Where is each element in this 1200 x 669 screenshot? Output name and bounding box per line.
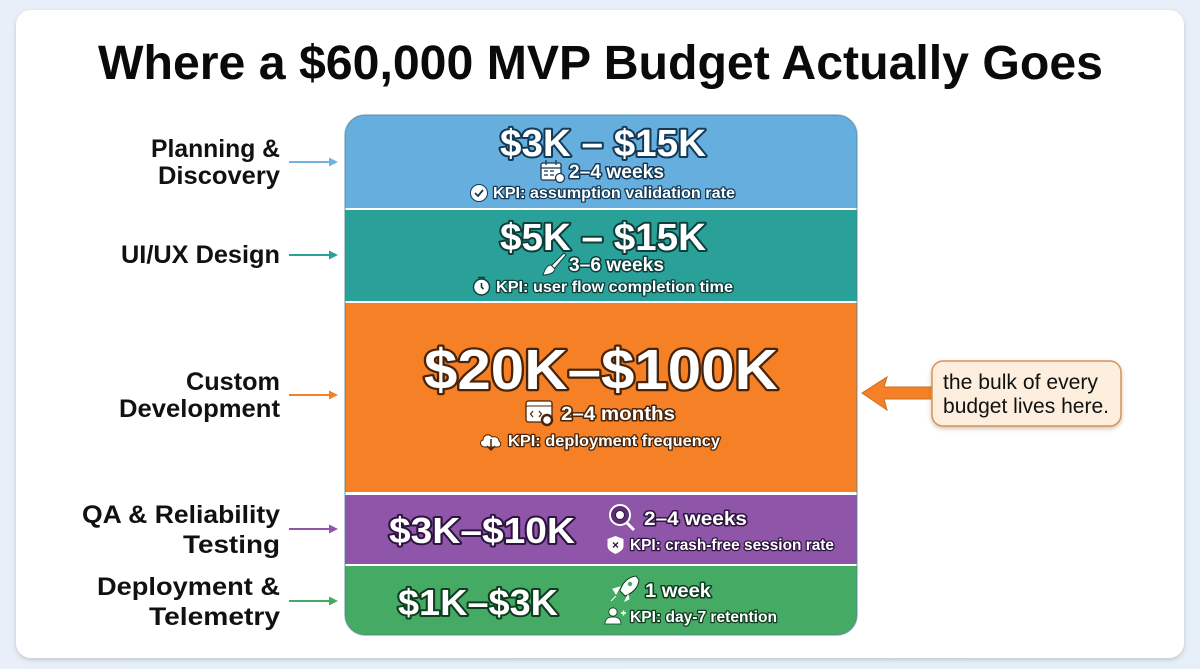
- label: UI/UX design: UI/UX Design: [121, 241, 280, 269]
- label: planning and discovery: Planning &: [151, 135, 280, 163]
- panel: UI/UX design layer: 3–6 weeks: [569, 255, 664, 276]
- panel: deployment and telemetry layer: $1K–$3K: [398, 582, 558, 623]
- arrow: deployment: [289, 596, 338, 606]
- panel: custom development layer: 2–4 months: [561, 404, 675, 425]
- label: QA and reliability testing: QA & Reliability: [82, 501, 280, 529]
- icon: user with plus: [605, 608, 626, 624]
- panel: stacked budget funnel: [345, 115, 857, 635]
- arrow: custom development: [289, 390, 338, 400]
- label: deployment and telemetry: Telemetry: [149, 603, 280, 631]
- title: Where a $60,000 MVP Budget Actually Goes: [98, 37, 1103, 90]
- icon: rocket: [611, 576, 639, 601]
- icon: magnifier with target: [610, 505, 634, 530]
- icon: code window with gear: [526, 401, 552, 425]
- panel: custom development layer: $20K–$100K: [424, 338, 778, 402]
- panel: deployment and telemetry layer: 1 week: [645, 581, 711, 602]
- panel: deployment and telemetry layer: [398, 576, 777, 626]
- icon: calendar with clock: [541, 160, 564, 182]
- label: custom development: [119, 368, 281, 423]
- label: deployment and telemetry: Deployment &: [97, 573, 280, 601]
- panel: QA and reliability testing layer: 2–4 weeks: [644, 509, 747, 530]
- label: QA and reliability testing: Testing: [183, 531, 280, 559]
- label: planning and discovery: [151, 135, 280, 190]
- label: custom development: Development: [119, 395, 281, 423]
- panel: UI/UX design layer: KPI: user flow completion time: [496, 279, 733, 296]
- panel: UI/UX design layer: [474, 217, 733, 296]
- panel: deployment and telemetry layer: KPI: day-7 retention: [630, 609, 777, 626]
- callout: the bulk of every: [943, 371, 1098, 394]
- arrow: QA: [289, 524, 338, 534]
- panel: QA and reliability testing layer: KPI: crash-free session rate: [630, 537, 834, 554]
- icon: cloud download: [481, 435, 501, 450]
- panel: QA and reliability testing layer: [389, 505, 834, 554]
- label: custom development: Custom: [186, 368, 280, 396]
- arrow: UI/UX: [289, 250, 338, 260]
- icon: check badge: [470, 184, 488, 202]
- callout: budget lives here.: [943, 395, 1109, 418]
- label: planning and discovery: Discovery: [158, 162, 280, 190]
- arrow: callout pointer: [862, 377, 933, 410]
- panel: planning and discovery layer: KPI: assumption validation rate: [493, 185, 735, 202]
- arrow: planning: [289, 158, 338, 166]
- callout: [932, 361, 1121, 426]
- label: deployment and telemetry: [97, 573, 280, 631]
- icon: paintbrush: [543, 253, 566, 275]
- panel: planning and discovery layer: 2–4 weeks: [569, 162, 664, 183]
- panel: UI/UX design layer: $5K – $15K: [500, 217, 707, 259]
- panel: custom development layer: KPI: deployment frequency: [508, 433, 720, 450]
- panel: planning and discovery layer: $3K – $15K: [500, 123, 707, 165]
- icon: shield with x: [608, 536, 624, 554]
- panel: QA and reliability testing layer: $3K–$10K: [389, 510, 575, 551]
- icon: stopwatch: [474, 278, 490, 295]
- panel: planning and discovery layer: [470, 123, 735, 202]
- label: QA and reliability testing: [82, 501, 280, 559]
- panel: custom development layer: [424, 338, 778, 450]
